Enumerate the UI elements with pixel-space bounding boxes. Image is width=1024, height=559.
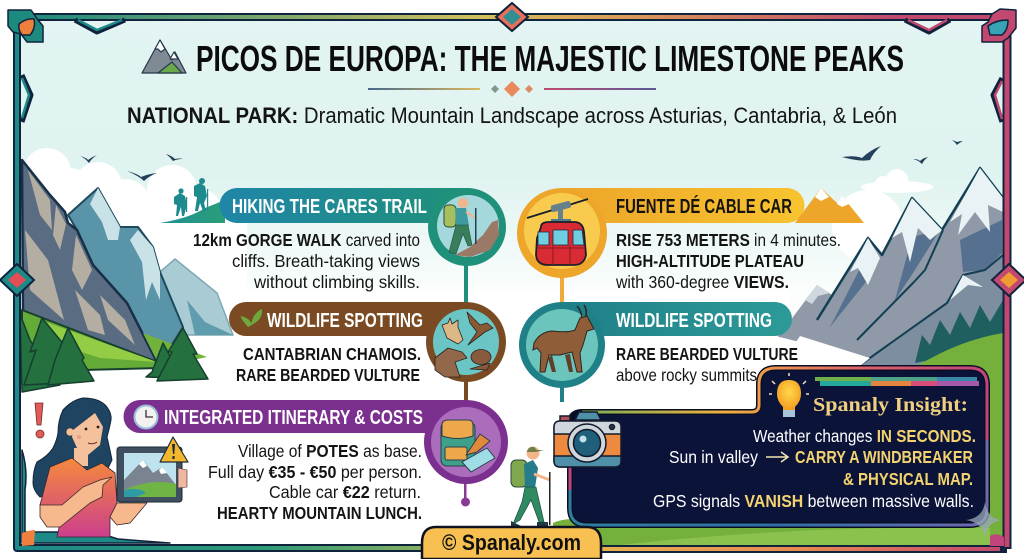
heading: HIKING THE CARES TRAIL bbox=[232, 196, 427, 218]
illustration: woman with tablet bbox=[33, 398, 188, 537]
callout text: Sun in valley bbox=[669, 447, 758, 467]
icon: cable car bbox=[517, 188, 607, 278]
body text bbox=[616, 344, 798, 385]
icon: light bulb bbox=[769, 373, 809, 417]
connector lines bbox=[461, 262, 564, 506]
panel: wildlife spotting left bbox=[229, 302, 506, 385]
body text: Full day €35 - €50 per person. bbox=[208, 462, 422, 482]
warning triangle bbox=[160, 437, 188, 462]
subtitle: NATIONAL PARK: Dramatic Mountain Landscape across Asturias, Cantabria, & León bbox=[127, 103, 897, 128]
callout: spanaly insight bbox=[570, 368, 1001, 537]
heading: WILDLIFE SPOTTING bbox=[267, 310, 423, 332]
badge: copyright: © Spanaly.com bbox=[442, 530, 581, 555]
callout text: & PHYSICAL MAP. bbox=[843, 469, 973, 489]
illustration: hiker bbox=[511, 446, 550, 526]
body text: HEARTY MOUNTAIN LUNCH. bbox=[217, 503, 422, 523]
icon: backpack and tickets bbox=[424, 400, 508, 484]
heading: FUENTE DÉ CABLE CAR bbox=[616, 195, 792, 218]
body text: above rocky summits bbox=[616, 365, 757, 385]
icon: mountain peaks bbox=[142, 40, 186, 73]
body text bbox=[236, 344, 421, 385]
callout heading: Spanaly Insight: bbox=[813, 394, 968, 416]
ground under insight box bbox=[553, 333, 1003, 545]
body text: 12km GORGE WALK carved into bbox=[193, 230, 420, 250]
body text: RARE BEARDED VULTURE bbox=[236, 365, 420, 385]
body text: with 360-degree VIEWS. bbox=[615, 272, 789, 292]
sparkle watermark bbox=[966, 502, 1001, 537]
body text: Cable car €22 return. bbox=[269, 482, 421, 502]
side and top notches bbox=[22, 20, 1002, 122]
body text bbox=[615, 230, 841, 292]
icon: leaf bbox=[241, 309, 262, 327]
exclamation mark bbox=[35, 403, 44, 438]
body text: cliffs. Breath-taking views bbox=[232, 251, 420, 271]
body text bbox=[193, 230, 420, 292]
tablet bbox=[117, 447, 187, 502]
body text bbox=[208, 441, 422, 523]
callout text: Weather changes IN SECONDS. bbox=[753, 426, 976, 446]
body text: Village of POTES as base. bbox=[238, 441, 422, 461]
heading: INTEGRATED ITINERARY & COSTS bbox=[164, 407, 423, 429]
icon: animals bbox=[426, 302, 506, 382]
badge: copyright bbox=[422, 527, 601, 559]
panel: fuente de cable car bbox=[517, 188, 864, 292]
body text: CANTABRIAN CHAMOIS. bbox=[243, 344, 421, 364]
body text: without climbing skills. bbox=[253, 272, 420, 292]
callout text: GPS signals VANISH between massive walls. bbox=[653, 491, 974, 511]
frame diamonds bbox=[0, 3, 1024, 296]
body text: HIGH-ALTITUDE PLATEAU bbox=[616, 251, 804, 271]
icon: hiker on rock bbox=[428, 188, 506, 266]
icon: orange mountains bbox=[795, 188, 864, 223]
heading: WILDLIFE SPOTTING bbox=[616, 310, 772, 332]
panel: integrated itinerary and costs bbox=[124, 400, 508, 523]
body text: RISE 753 METERS in 4 minutes. bbox=[616, 230, 841, 250]
body text: RARE BEARDED VULTURE bbox=[616, 344, 798, 364]
hikers on hill silhouette bbox=[160, 178, 225, 223]
panel: wildlife spotting right bbox=[519, 302, 798, 388]
callout text: CARRY A WINDBREAKER bbox=[795, 447, 973, 467]
left mountains bbox=[22, 160, 233, 370]
bottom-left band bbox=[22, 450, 170, 543]
panel: hiking the cares trail bbox=[160, 178, 506, 292]
title ornament bbox=[368, 81, 656, 97]
icon: camera bbox=[554, 412, 621, 467]
icon: clock bbox=[134, 406, 158, 428]
left pine trees bbox=[20, 314, 208, 392]
birds bbox=[80, 140, 963, 181]
right mountains bbox=[778, 168, 1003, 370]
icon: chamois bbox=[519, 302, 605, 388]
callout text bbox=[653, 426, 976, 511]
